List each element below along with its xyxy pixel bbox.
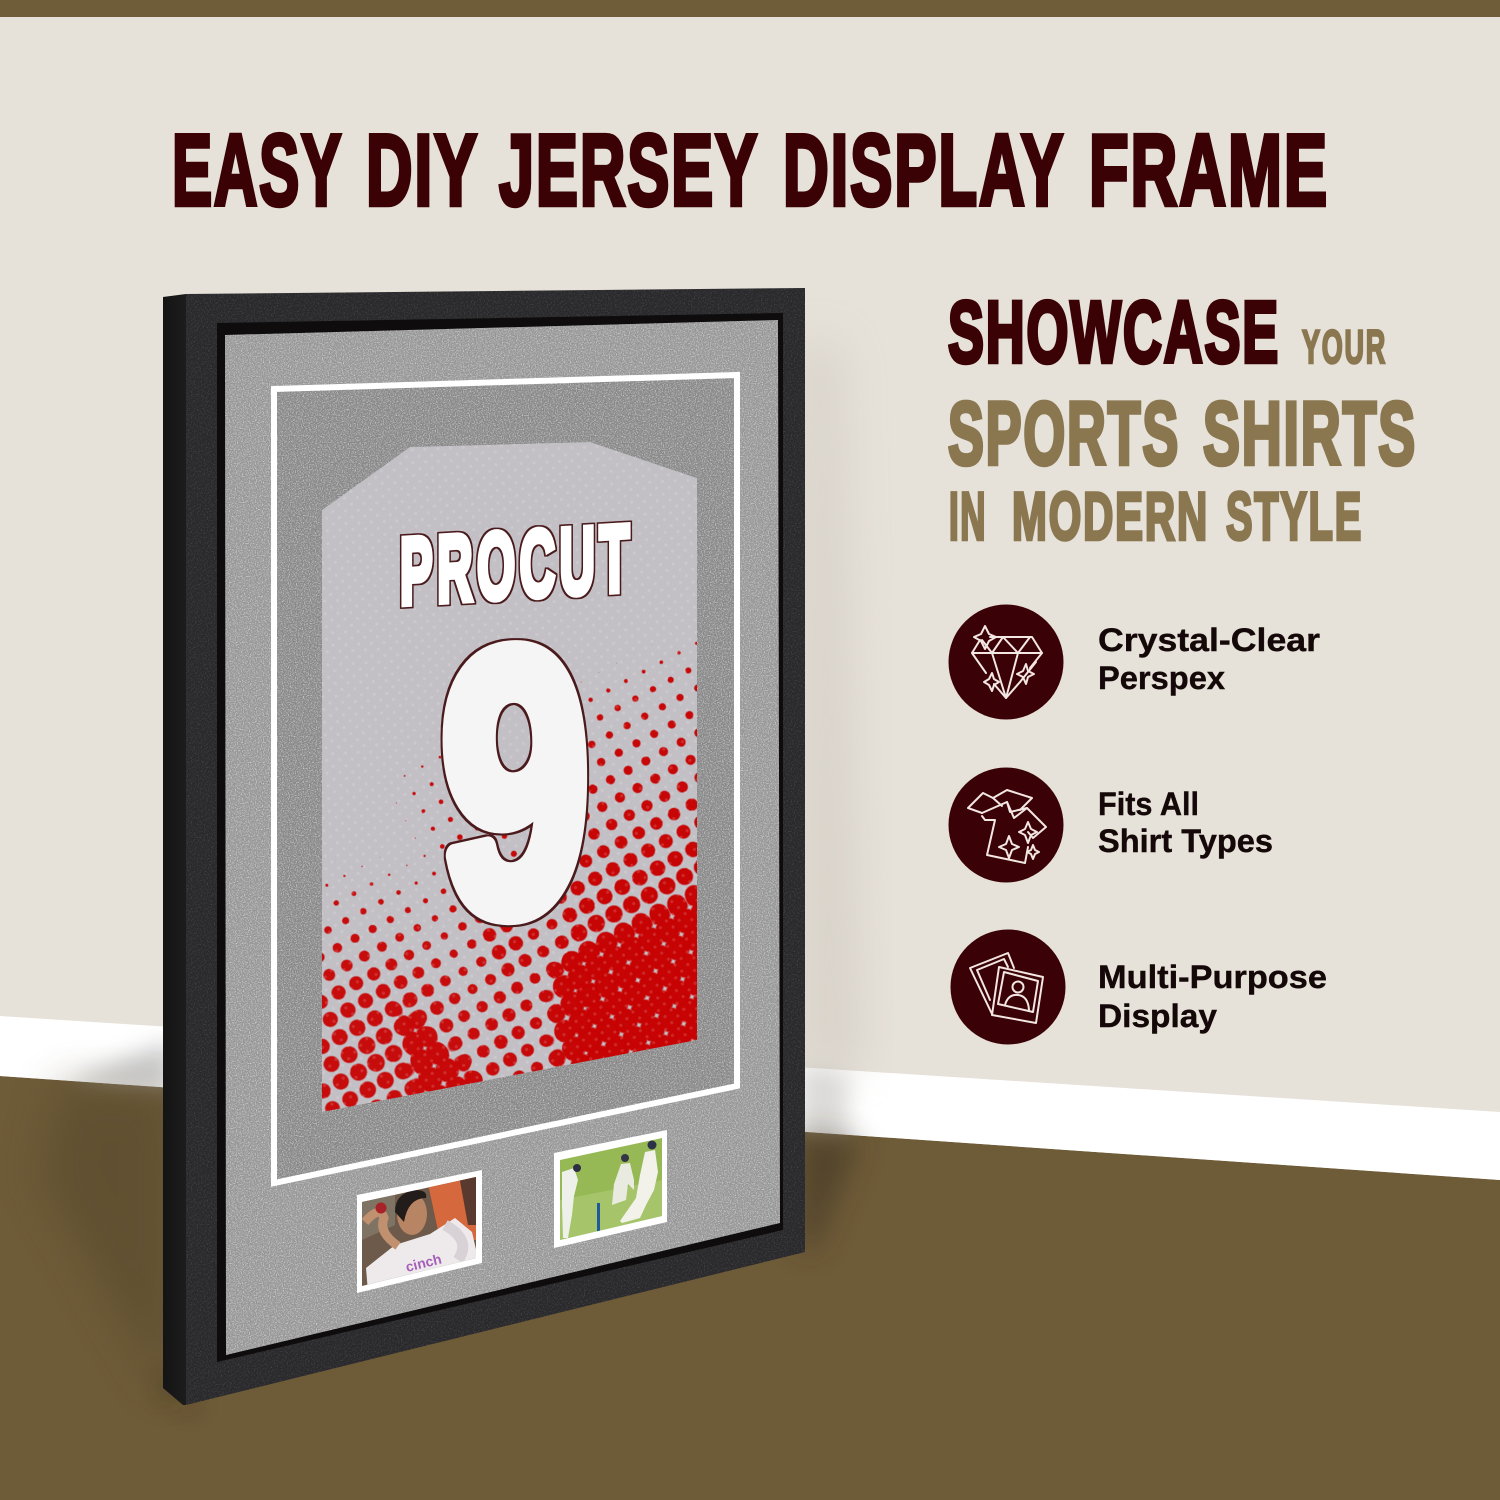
- label: crystal-clear perspex: Perspex: [1098, 660, 1225, 696]
- icon: diamond: [948, 604, 1064, 720]
- frame inner lip: [217, 313, 783, 1362]
- sponsor word on shirt: cinch: [404, 1251, 443, 1275]
- feature: multi-purpose display: [950, 930, 1327, 1044]
- heading: sports shirts: SPORTS: [948, 383, 1180, 483]
- title: DIY: [366, 115, 479, 227]
- title: DISPLAY: [783, 115, 1065, 227]
- icon: shirts: [948, 768, 1064, 882]
- picture frame: [163, 288, 805, 1405]
- heading: in modern style: IN: [949, 478, 987, 554]
- label: crystal-clear perspex: Crystal-Clear: [1098, 622, 1320, 658]
- photo card: bowler: [357, 1170, 482, 1293]
- jersey name: PROCUT: [400, 505, 634, 624]
- jersey red halftone: [322, 626, 697, 1112]
- title: EASY: [172, 115, 343, 227]
- label: multi-purpose display: Multi-Purpose: [1098, 959, 1327, 995]
- jersey: [322, 442, 697, 1112]
- feature: crystal-clear perspex: [948, 604, 1320, 720]
- jersey mesh texture: [322, 442, 697, 1112]
- grey mat board: [225, 320, 780, 1355]
- white window border: [274, 375, 737, 1183]
- label: fits all shirt types: Shirt Types: [1098, 823, 1273, 859]
- label: crystal-clear perspex: [1098, 622, 1320, 696]
- shadows behind frame: [40, 340, 862, 1410]
- frame front: [186, 288, 805, 1405]
- photo card: cricket match: [554, 1130, 667, 1248]
- skirting board: [0, 1016, 1500, 1180]
- icon: photos: [950, 930, 1066, 1044]
- jersey fabric: [322, 442, 697, 1112]
- inner mat window: [274, 375, 737, 1183]
- label: fits all shirt types: [1098, 786, 1273, 859]
- heading: your: YOUR: [1302, 320, 1387, 373]
- jersey number: 9: [442, 574, 589, 991]
- heading: in modern style: STYLE: [1226, 478, 1363, 554]
- heading: showcase: SHOWCASE: [948, 284, 1280, 381]
- title: [172, 115, 1329, 227]
- top band: [0, 0, 1500, 17]
- label: multi-purpose display: [1098, 959, 1327, 1034]
- title: FRAME: [1089, 115, 1329, 227]
- heading: in modern style: MODERN: [1012, 478, 1209, 554]
- label: fits all shirt types: Fits All: [1098, 786, 1199, 822]
- title: JERSEY: [499, 115, 759, 227]
- feature: fits all shirt types: [948, 768, 1273, 882]
- label: multi-purpose display: Display: [1098, 998, 1217, 1034]
- floor: [0, 1076, 1500, 1500]
- frame side edge: [163, 294, 186, 1405]
